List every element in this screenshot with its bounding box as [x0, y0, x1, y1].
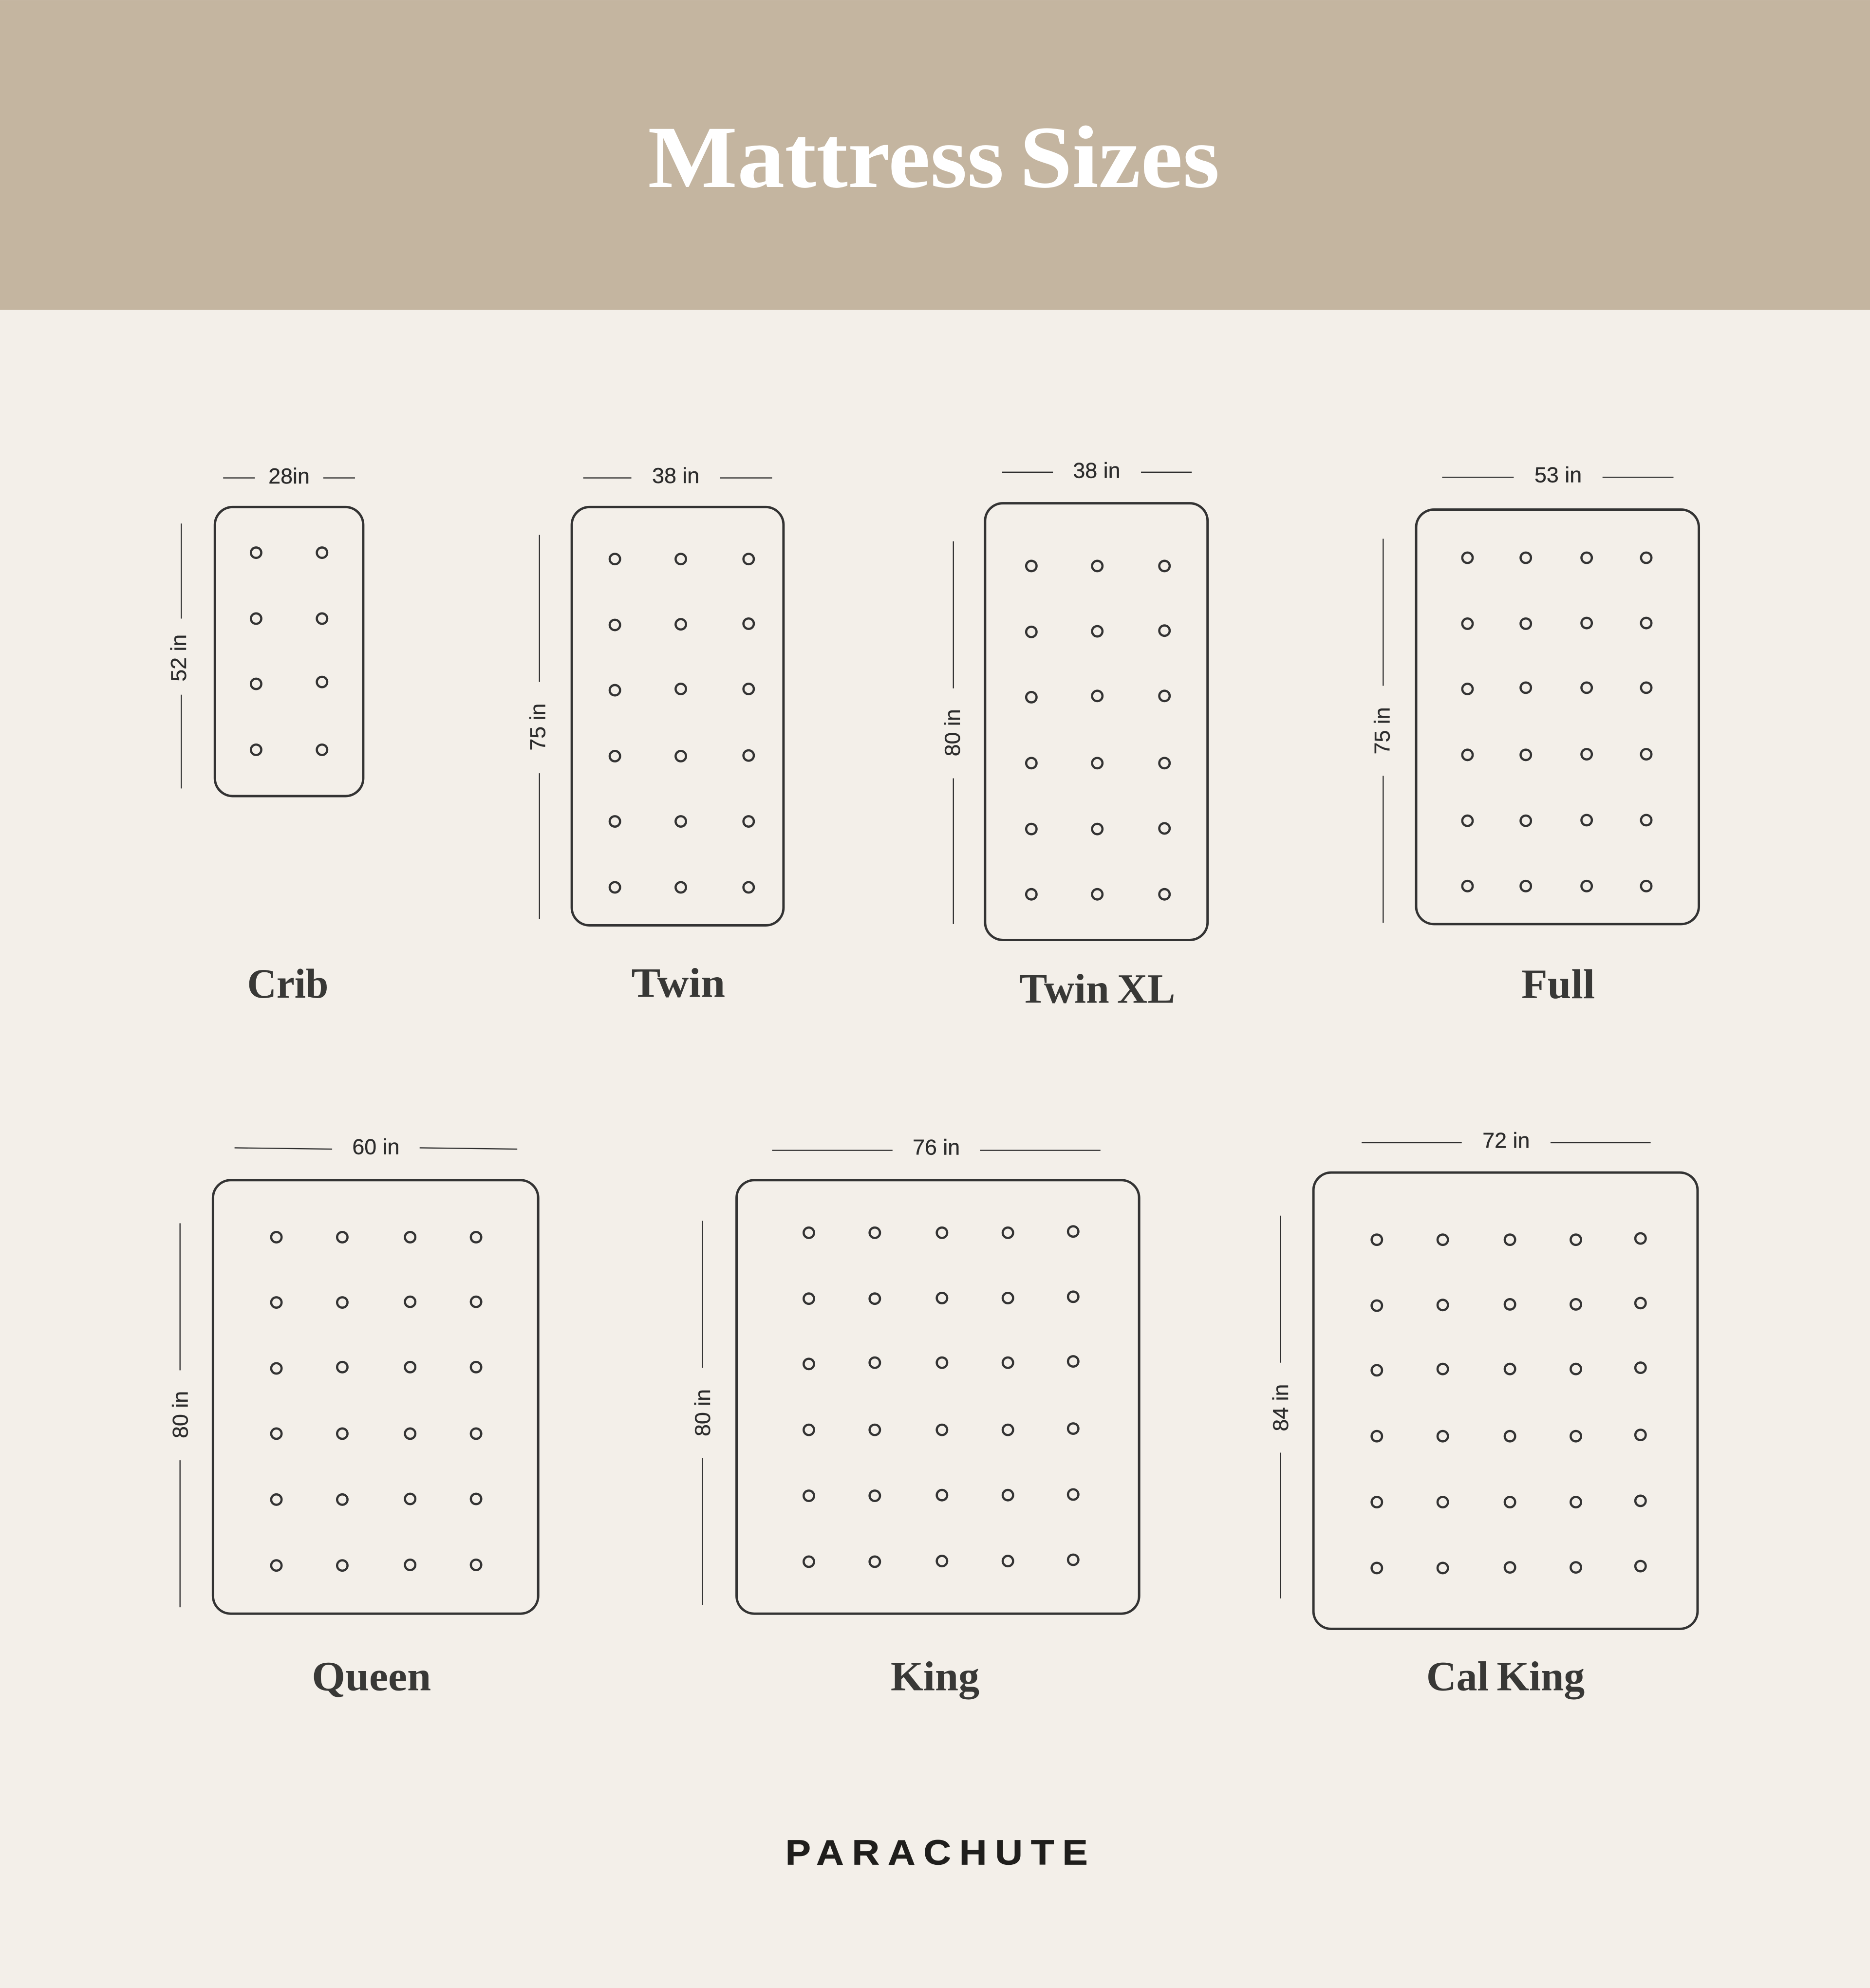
- logo: Parachute: PARACHUTE: [785, 1833, 1096, 1873]
- title: Mattress Sizes: [648, 109, 1219, 206]
- tufting dots: Queen: [271, 1232, 481, 1571]
- size name: King: King: [891, 1653, 979, 1700]
- size name: Crib: Crib: [247, 960, 328, 1007]
- height dimension: 80 in: 80 in: [168, 1391, 192, 1438]
- height dimension: 84 in: 84 in: [1269, 1384, 1293, 1431]
- tufting dots: Cal King: [1372, 1233, 1646, 1573]
- mattress outline: Cal King: [1313, 1172, 1698, 1629]
- tufting dots: King: [804, 1226, 1078, 1567]
- height dimension: 75 in: 75 in: [1370, 707, 1394, 754]
- panel: Twin XL: [940, 459, 1208, 1012]
- size name: Cal King: Cal King: [1426, 1653, 1585, 1700]
- size name: Full: Full: [1521, 961, 1595, 1007]
- panel: Full: [1370, 463, 1699, 1007]
- mattress outline: Crib: [215, 507, 363, 796]
- height dimension: 52 in: 52 in: [167, 634, 191, 682]
- size name: Twin XL: Twin XL: [1019, 965, 1175, 1012]
- panel: Crib: [167, 464, 363, 1007]
- mattress outline: Full: [1416, 510, 1699, 924]
- mattress outline: Twin: [572, 507, 784, 926]
- panel: Cal King: [1269, 1128, 1698, 1700]
- tufting dots: Full: [1462, 553, 1651, 891]
- tufting dots: Twin: [610, 554, 754, 892]
- panel: King: [691, 1135, 1139, 1700]
- mattress outline: Queen: [213, 1180, 538, 1614]
- height dimension: 80 in: 80 in: [691, 1389, 715, 1436]
- size name: Twin: Twin: [631, 960, 725, 1006]
- width dimension: 28in: 28in: [268, 464, 310, 488]
- panel: Twin: [525, 464, 784, 1006]
- width dimension: 76 in: 76 in: [913, 1135, 960, 1160]
- header banner: [0, 0, 1870, 310]
- width dimension: 72 in: 72 in: [1482, 1128, 1530, 1152]
- height dimension: 80 in: 80 in: [940, 709, 965, 756]
- tufting dots: Crib: [251, 547, 327, 755]
- height dimension: 75 in: 75 in: [525, 704, 550, 751]
- panel: Queen: [168, 1134, 538, 1700]
- mattress outline: Twin XL: [985, 503, 1208, 940]
- size name: Queen: Queen: [312, 1653, 431, 1700]
- width dimension: 38 in: 38 in: [1073, 459, 1120, 483]
- width dimension: 53 in: 53 in: [1534, 463, 1582, 487]
- width dimension: 60 in: 60 in: [352, 1134, 399, 1159]
- width dimension: 38 in: 38 in: [652, 464, 699, 488]
- mattress outline: King: [737, 1180, 1139, 1614]
- tufting dots: Twin XL: [1026, 561, 1170, 899]
